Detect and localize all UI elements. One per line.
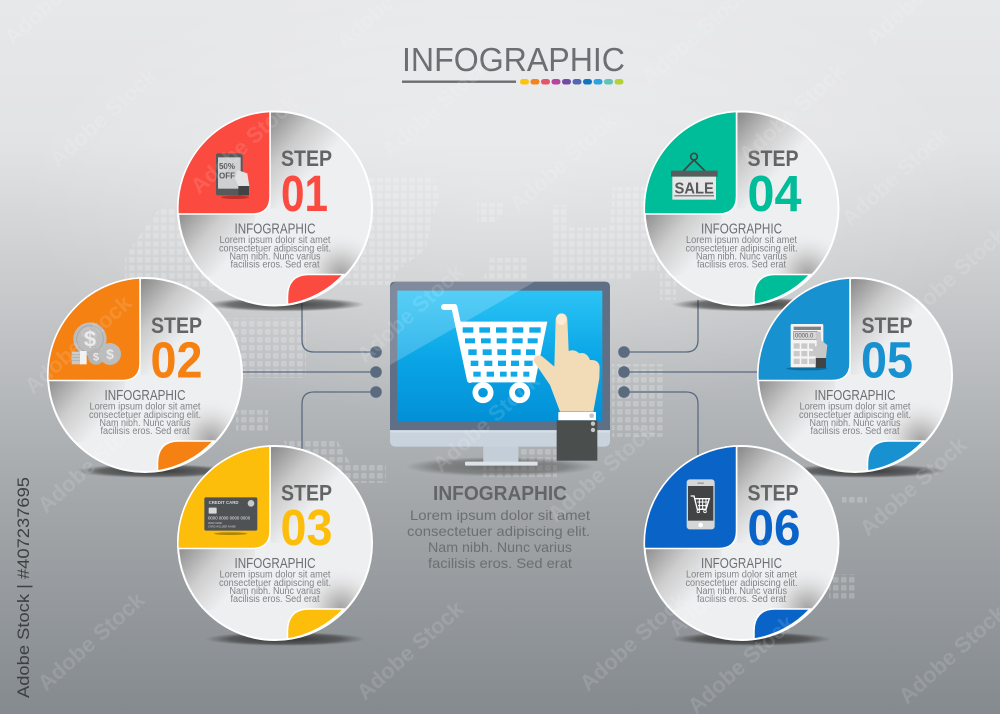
icon: credit card: 0000 0000 0000 0000 (208, 516, 251, 521)
panel: step 03: 03 (280, 499, 332, 556)
panel: step 06: STEP (748, 480, 798, 506)
panel: step 05 (758, 278, 952, 478)
panel: step 06: INFOGRAPHIC (701, 555, 782, 572)
icon: tablet 50% off (216, 153, 249, 199)
icon: sale sign (671, 153, 718, 200)
icon: coins: $ (93, 352, 100, 364)
panel: step 03: Lorem ipsum dolor sit amet (220, 568, 331, 580)
icon: coins: $ (84, 327, 96, 352)
panel: step 05: facilisis eros. Sed erat (810, 425, 900, 437)
center text (407, 483, 590, 571)
panel: step 04: Nam nibh. Nunc varius (696, 250, 787, 262)
panel: step 01: Nam nibh. Nunc varius (230, 250, 320, 262)
watermarks: Adobe Stock (837, 122, 954, 231)
icon: pointing hand (533, 313, 600, 461)
icon: sale sign: SALE (674, 180, 714, 197)
icon: calculator (786, 324, 827, 370)
panel: step 03: facilisis eros. Sed erat (230, 593, 320, 605)
panel: step 02: consectetuer adipiscing elit. (89, 409, 201, 421)
icon: coins (72, 322, 121, 365)
watermarks: Adobe Stock (186, 90, 303, 199)
panel: step 01: consectetuer adipiscing elit. (219, 242, 331, 254)
connector dots (370, 346, 630, 398)
panel: step 05: Nam nibh. Nunc varius (810, 417, 900, 429)
watermarks: Adobe Stock (505, 108, 622, 217)
panel: step 02: Lorem ipsum dolor sit amet (90, 400, 201, 412)
panel: step 06: 06 (748, 499, 800, 556)
panel: step 02: Nam nibh. Nunc varius (100, 417, 190, 429)
panel: step 01 (178, 111, 372, 312)
panel: step 05: INFOGRAPHIC (814, 387, 896, 404)
watermarks: Adobe Stock (352, 596, 469, 705)
icon: tablet 50% off: 50% (219, 162, 235, 171)
watermarks: Adobe Stock (377, 54, 494, 163)
panel: step 06: Nam nibh. Nunc varius (696, 585, 787, 597)
panel: step 05: 05 (861, 332, 913, 388)
panel: step 04: Lorem ipsum dolor sit amet (686, 234, 797, 246)
icon: calculator: 0000.0 (795, 334, 814, 340)
watermarks: Adobe Stock (352, 259, 469, 368)
world map dots (125, 178, 867, 601)
center text: Nam nibh. Nunc varius (428, 539, 572, 555)
monitor with shopping cart and hand (390, 282, 610, 477)
panel: step 04 (644, 111, 838, 312)
panel: step 05: Lorem ipsum dolor sit amet (800, 400, 911, 412)
panel: step 01: Lorem ipsum dolor sit amet (220, 234, 331, 246)
watermarks: Adobe Stock (428, 368, 545, 477)
stock id vertical text: Adobe Stock | #407237695 (14, 477, 33, 698)
panel: step 03: Nam nibh. Nunc varius (230, 585, 320, 597)
icon: tablet 50% off: OFF (219, 171, 235, 180)
icon: phone with cart (687, 479, 715, 529)
center text: consectetuer adipiscing elit. (407, 523, 590, 539)
watermarks: Adobe Stock (855, 432, 972, 541)
panel: step 01: facilisis eros. Sed erat (230, 259, 320, 271)
watermarks: Adobe Stock (734, 58, 851, 167)
icon: credit card: CARD HOLDER NAME (208, 525, 236, 529)
icon: credit card: 00/00 00/00 (208, 521, 223, 525)
panel: step 06: Lorem ipsum dolor sit amet (686, 568, 797, 580)
title: INFOGRAPHIC (402, 41, 625, 78)
panel: step 04: 04 (748, 165, 802, 222)
panel: step 02: INFOGRAPHIC (104, 387, 186, 404)
panel: step 02: 02 (150, 332, 202, 388)
panel: step 03 (178, 446, 372, 646)
panel: step 01: STEP (281, 146, 332, 171)
panel: step 04: consectetuer adipiscing elit. (686, 242, 798, 254)
panel: step 06: consectetuer adipiscing elit. (686, 577, 798, 589)
panel: step 03: STEP (281, 480, 332, 506)
panel: step 05: STEP (862, 313, 912, 338)
watermarks: Adobe Stock (664, 532, 781, 641)
panel: step 04: facilisis eros. Sed erat (697, 259, 786, 271)
panel: step 04: STEP (748, 146, 798, 171)
icon: credit card (204, 497, 257, 535)
icon: credit card: CREDIT CARD (209, 500, 238, 505)
panel: step 03: INFOGRAPHIC (234, 555, 316, 572)
panel: step 03: consectetuer adipiscing elit. (219, 577, 331, 589)
center text: Lorem ipsum dolor sit amet (410, 507, 590, 523)
connector lines (238, 300, 762, 455)
panel: step 01: 01 (281, 165, 328, 222)
panel: step 02: facilisis eros. Sed erat (100, 425, 190, 437)
panel: step 06: facilisis eros. Sed erat (697, 593, 786, 605)
center text: INFOGRAPHIC (433, 483, 567, 505)
panel: step 01: INFOGRAPHIC (234, 220, 316, 237)
icon: shopping cart (444, 307, 547, 400)
center text: facilisis eros. Sed erat (428, 555, 572, 571)
watermarks: Adobe Stock (575, 587, 692, 696)
panel: step 04: INFOGRAPHIC (701, 220, 782, 237)
watermarks: Adobe Stock (20, 290, 137, 399)
watermarks: Adobe Stock (543, 418, 660, 527)
watermarks: Adobe Stock (45, 63, 162, 172)
panel: step 06 (644, 446, 838, 646)
watermarks: Adobe Stock (33, 587, 150, 696)
panel: step 02: STEP (151, 313, 202, 338)
panel: step 05: consectetuer adipiscing elit. (799, 409, 911, 421)
watermarks: Adobe Stock (33, 409, 150, 518)
icon: coins: $ (106, 346, 114, 362)
panel: step 02 (48, 278, 242, 478)
